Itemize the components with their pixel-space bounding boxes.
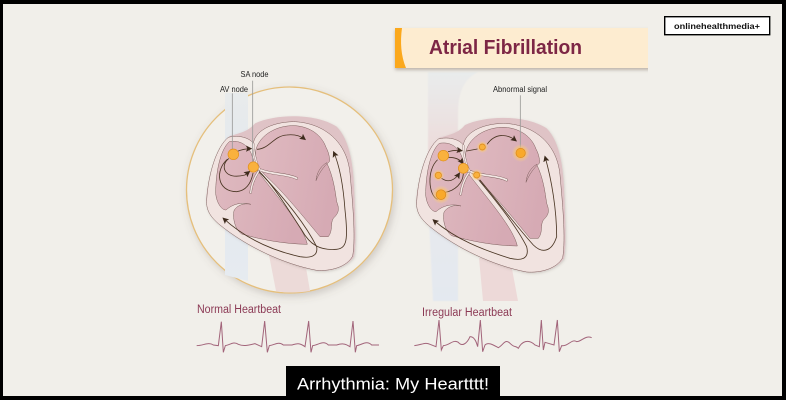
banner accent xyxy=(395,28,406,68)
label: SA node: SA node xyxy=(240,70,269,79)
label: abnormal signal: Abnormal signal xyxy=(493,85,547,94)
abnormal signal pointer xyxy=(519,95,522,150)
signal nodes xyxy=(432,141,530,204)
heading: normal heartbeat: Normal Heartbeat xyxy=(197,304,282,316)
vessel: right heart blue column xyxy=(428,72,478,301)
label: AV node: AV node xyxy=(220,85,249,94)
panel: atrial fibrillation heart xyxy=(416,85,566,273)
magnifier circle xyxy=(186,87,392,293)
vessel: blue column xyxy=(225,93,248,281)
brand badge xyxy=(665,17,770,35)
vessel: pink aorta xyxy=(268,250,310,292)
title text: Atrial Fibrillation xyxy=(429,36,582,59)
brand badge: onlinehealthmedia+ xyxy=(674,21,760,31)
irregular signals overlay xyxy=(430,95,557,259)
AV node marker xyxy=(228,149,239,160)
heading: irregular heartbeat: Irregular Heartbeat xyxy=(422,307,513,319)
title banner xyxy=(395,28,665,68)
ECG: normal heartbeat xyxy=(197,321,379,352)
conduction arrows xyxy=(220,135,347,257)
SA node marker xyxy=(248,162,258,172)
caption bar xyxy=(286,366,500,400)
ECG: irregular heartbeat xyxy=(414,320,592,352)
panel: normal heart circle xyxy=(186,70,392,293)
heart illustration xyxy=(416,118,566,273)
normal heart illustration xyxy=(206,81,356,271)
caption bar: Arrhythmia: My Heartttt! xyxy=(297,376,489,394)
pointer lines xyxy=(232,81,253,163)
vessel: right heart pink aorta xyxy=(479,258,518,301)
